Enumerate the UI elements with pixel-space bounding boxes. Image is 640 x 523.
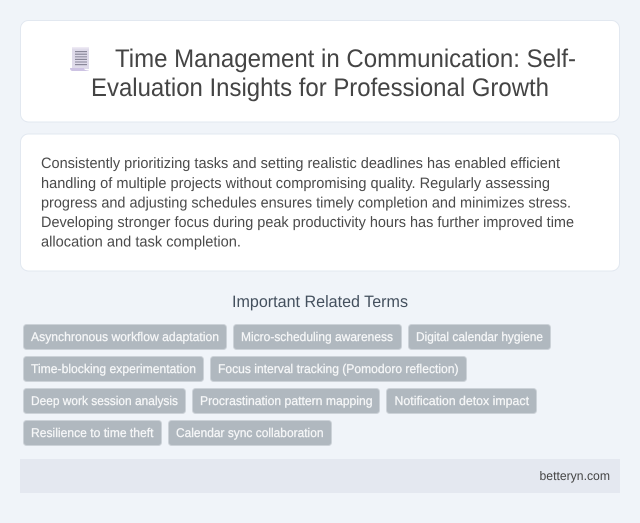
panel: self-evaluation summary xyxy=(20,134,620,271)
tag xyxy=(24,388,186,414)
title: Time Management in Communication: Self- xyxy=(115,45,576,73)
tag xyxy=(210,356,466,382)
tag: Deep work session analysis xyxy=(31,394,178,408)
icon: document scroll xyxy=(70,47,89,71)
title xyxy=(91,45,576,102)
tag: Resilience to time theft xyxy=(31,426,154,440)
tag xyxy=(24,356,204,382)
tag: Focus interval tracking (Pomodoro reflection) xyxy=(218,362,458,376)
tag xyxy=(234,324,402,350)
tag xyxy=(386,388,536,414)
tag: Calendar sync collaboration xyxy=(176,426,324,440)
tag: Digital calendar hygiene xyxy=(416,330,543,344)
tag list xyxy=(24,324,550,446)
text block: summary paragraph: Consistently prioritizing tasks and setting realistic deadlines has enabled efficient xyxy=(41,155,561,172)
tag xyxy=(168,420,332,446)
tag xyxy=(24,324,226,350)
heading: important related terms: Important Related Terms xyxy=(232,293,408,311)
panel: title card xyxy=(20,20,620,122)
tag xyxy=(24,420,162,446)
tag: Time-blocking experimentation xyxy=(31,362,196,376)
footer xyxy=(20,459,620,493)
tag xyxy=(408,324,550,350)
text block: summary paragraph: allocation and task completion. xyxy=(41,234,241,250)
tag: Micro-scheduling awareness xyxy=(241,330,393,344)
text block: summary paragraph: handling of multiple projects without compromising quality. Regularly assessing xyxy=(41,175,550,192)
title: Evaluation Insights for Professional Growth xyxy=(91,74,549,102)
text block: summary paragraph: Developing stronger focus during peak productivity hours has further improved time xyxy=(41,214,574,231)
footer text: betteryn.com xyxy=(540,469,610,483)
text block: summary paragraph: progress and adjusting schedules ensures timely completion and minimizes stress. xyxy=(41,194,571,212)
tag xyxy=(192,388,380,414)
tag: Procrastination pattern mapping xyxy=(200,394,372,408)
tag: Notification detox impact xyxy=(394,394,529,408)
text block: summary paragraph xyxy=(41,155,574,250)
tag: Asynchronous workflow adaptation xyxy=(31,330,219,344)
